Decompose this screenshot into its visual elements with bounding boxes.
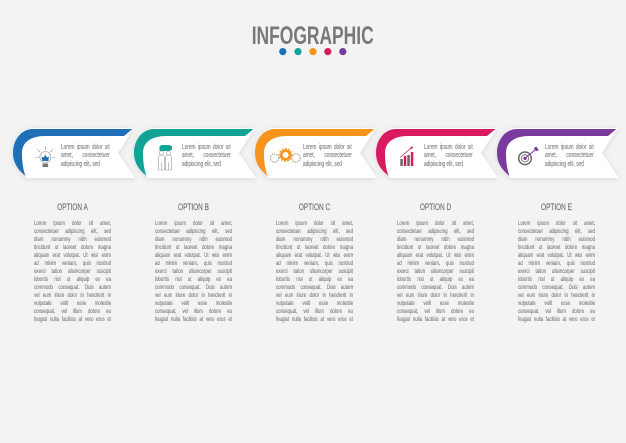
card text xyxy=(61,144,110,168)
text block: vel eum iriure dolor in hendrerit in xyxy=(397,292,474,299)
text block: feugiat nulla facilisis at vero eros et xyxy=(276,316,353,323)
text block: diam nonummy nibh euismod xyxy=(34,236,111,243)
text block: tincidunt ut laoreet dolore magna xyxy=(276,244,353,251)
text block: consectetuer adipiscing elit, sed xyxy=(397,228,474,235)
text block: Lorem ipsum dolor sit amet, xyxy=(518,220,595,226)
text block: diam nonummy nibh euismod xyxy=(518,236,595,243)
panel: card C xyxy=(254,128,376,180)
card text xyxy=(545,144,594,168)
text block: diam nonummy nibh euismod xyxy=(155,236,232,243)
text block: vel eum iriure dolor in hendrerit in xyxy=(276,292,353,299)
heading: OPTION D xyxy=(420,202,451,212)
text block: vel eum iriure dolor in hendrerit in xyxy=(155,292,232,299)
heading: OPTION A xyxy=(57,202,88,212)
title: INFOGRAPHIC xyxy=(252,22,374,50)
panel: card D xyxy=(374,128,498,180)
card text xyxy=(424,144,473,168)
heading: OPTION B xyxy=(178,202,209,212)
text block: feugiat nulla facilisis at vero eros et xyxy=(34,316,111,323)
heading: OPTION C xyxy=(299,202,330,212)
card text: adipiscing elit, sed xyxy=(303,161,342,168)
text block: consectetuer adipiscing elit, sed xyxy=(34,228,111,235)
text block: feugiat nulla facilisis at vero eros et xyxy=(155,316,232,323)
text block: tincidunt ut laoreet dolore magna xyxy=(34,244,111,251)
color dots xyxy=(279,48,346,56)
text block: consectetuer adipiscing elit, sed xyxy=(276,228,353,235)
text block xyxy=(518,220,596,323)
panel: card E xyxy=(496,128,618,180)
text block: lobortis nisl ut aliquip ex ea xyxy=(397,276,474,283)
text block: commodo consequat. Duis autem xyxy=(34,284,111,291)
text block: consequat, vel illum dolore eu xyxy=(518,308,595,315)
text block xyxy=(155,220,232,323)
text block: lobortis nisl ut aliquip ex ea xyxy=(276,276,353,283)
icon: bar chart xyxy=(400,146,413,166)
text block: lobortis nisl ut aliquip ex ea xyxy=(34,276,111,283)
text block: aliquam erat volutpat. Ut wisi enim xyxy=(397,252,474,259)
text block: consequat, vel illum dolore eu xyxy=(34,308,111,315)
text block: ad minim veniam, quis nostrud xyxy=(518,260,595,267)
text block: Lorem ipsum dolor sit amet, xyxy=(155,220,232,226)
card text: Lorem ipsum dolor sit xyxy=(61,144,110,151)
card text: adipiscing elit, sed xyxy=(182,161,221,168)
card text xyxy=(303,144,352,168)
text block: vulputate velit esse molestie xyxy=(34,300,111,307)
text block: diam nonummy nibh euismod xyxy=(276,236,353,243)
card text: adipiscing elit, sed xyxy=(424,161,463,168)
panel: option A xyxy=(34,202,112,323)
text block: Lorem ipsum dolor sit amet, xyxy=(34,220,111,226)
text block: lobortis nisl ut aliquip ex ea xyxy=(155,276,232,283)
text block: diam nonummy nibh euismod xyxy=(397,236,474,243)
text block: consectetuer adipiscing elit, sed xyxy=(518,228,595,235)
text block xyxy=(34,220,112,323)
text block: commodo consequat. Duis autem xyxy=(397,284,474,291)
text block: tincidunt ut laoreet dolore magna xyxy=(518,244,595,251)
text block: exerci tation ullamcorper suscipit xyxy=(518,268,595,275)
text block: consequat, vel illum dolore eu xyxy=(276,308,353,315)
card text: Lorem ipsum dolor sit xyxy=(424,144,473,151)
text block: ad minim veniam, quis nostrud xyxy=(397,260,474,267)
card text: Lorem ipsum dolor sit xyxy=(303,144,352,151)
text block: exerci tation ullamcorper suscipit xyxy=(276,268,353,275)
text block: feugiat nulla facilisis at vero eros et xyxy=(397,316,474,323)
text block: aliquam erat volutpat. Ut wisi enim xyxy=(518,252,595,259)
text block: vulputate velit esse molestie xyxy=(397,300,474,307)
text block: commodo consequat. Duis autem xyxy=(518,284,595,291)
card text: amet, consectetuer xyxy=(61,152,110,159)
text block: aliquam erat volutpat. Ut wisi enim xyxy=(276,252,353,259)
panel: card A xyxy=(12,128,134,180)
text block: tincidunt ut laoreet dolore magna xyxy=(397,244,474,251)
text block: vulputate velit esse molestie xyxy=(276,300,353,307)
text block: exerci tation ullamcorper suscipit xyxy=(397,268,474,275)
text block: vulputate velit esse molestie xyxy=(155,300,232,307)
card text: adipiscing elit, sed xyxy=(545,161,584,168)
text block: ad minim veniam, quis nostrud xyxy=(155,260,232,267)
text block: consectetuer adipiscing elit, sed xyxy=(155,228,232,235)
card text: amet, consectetuer xyxy=(182,152,231,159)
panel: option B xyxy=(155,202,232,323)
text block: aliquam erat volutpat. Ut wisi enim xyxy=(155,252,232,259)
text block: vel eum iriure dolor in hendrerit in xyxy=(34,292,111,299)
text block xyxy=(397,220,474,323)
text block: vulputate velit esse molestie xyxy=(518,300,595,307)
text block: ad minim veniam, quis nostrud xyxy=(34,260,111,267)
text block: consequat, vel illum dolore eu xyxy=(397,308,474,315)
text block: vel eum iriure dolor in hendrerit in xyxy=(518,292,595,299)
text block: consequat, vel illum dolore eu xyxy=(155,308,232,315)
card text: Lorem ipsum dolor sit xyxy=(545,144,594,151)
card text: adipiscing elit, sed xyxy=(61,161,100,168)
text block: exerci tation ullamcorper suscipit xyxy=(155,268,232,275)
text block: lobortis nisl ut aliquip ex ea xyxy=(518,276,595,283)
icon: target xyxy=(518,146,539,165)
text block: exerci tation ullamcorper suscipit xyxy=(34,268,111,275)
text block: feugiat nulla facilisis at vero eros et xyxy=(518,316,595,323)
text block: Lorem ipsum dolor sit amet, xyxy=(276,220,353,226)
icon: light bulb xyxy=(35,146,55,167)
text block xyxy=(276,220,354,323)
card text: amet, consectetuer xyxy=(545,152,594,159)
panel: option E xyxy=(518,202,596,323)
text block: tincidunt ut laoreet dolore magna xyxy=(155,244,232,251)
icon: gears xyxy=(270,149,300,162)
text block: Lorem ipsum dolor sit amet, xyxy=(397,220,474,226)
icon: two people xyxy=(158,145,172,170)
panel: card B xyxy=(132,128,256,180)
heading: OPTION E xyxy=(541,202,572,212)
text block: commodo consequat. Duis autem xyxy=(276,284,353,291)
text block: ad minim veniam, quis nostrud xyxy=(276,260,353,267)
card text: Lorem ipsum dolor sit xyxy=(182,144,231,151)
card text: amet, consectetuer xyxy=(303,152,352,159)
panel: option C xyxy=(276,202,354,323)
card text: amet, consectetuer xyxy=(424,152,473,159)
text block: commodo consequat. Duis autem xyxy=(155,284,232,291)
text block: aliquam erat volutpat. Ut wisi enim xyxy=(34,252,111,259)
card text xyxy=(182,144,231,168)
panel: option D xyxy=(397,202,474,323)
